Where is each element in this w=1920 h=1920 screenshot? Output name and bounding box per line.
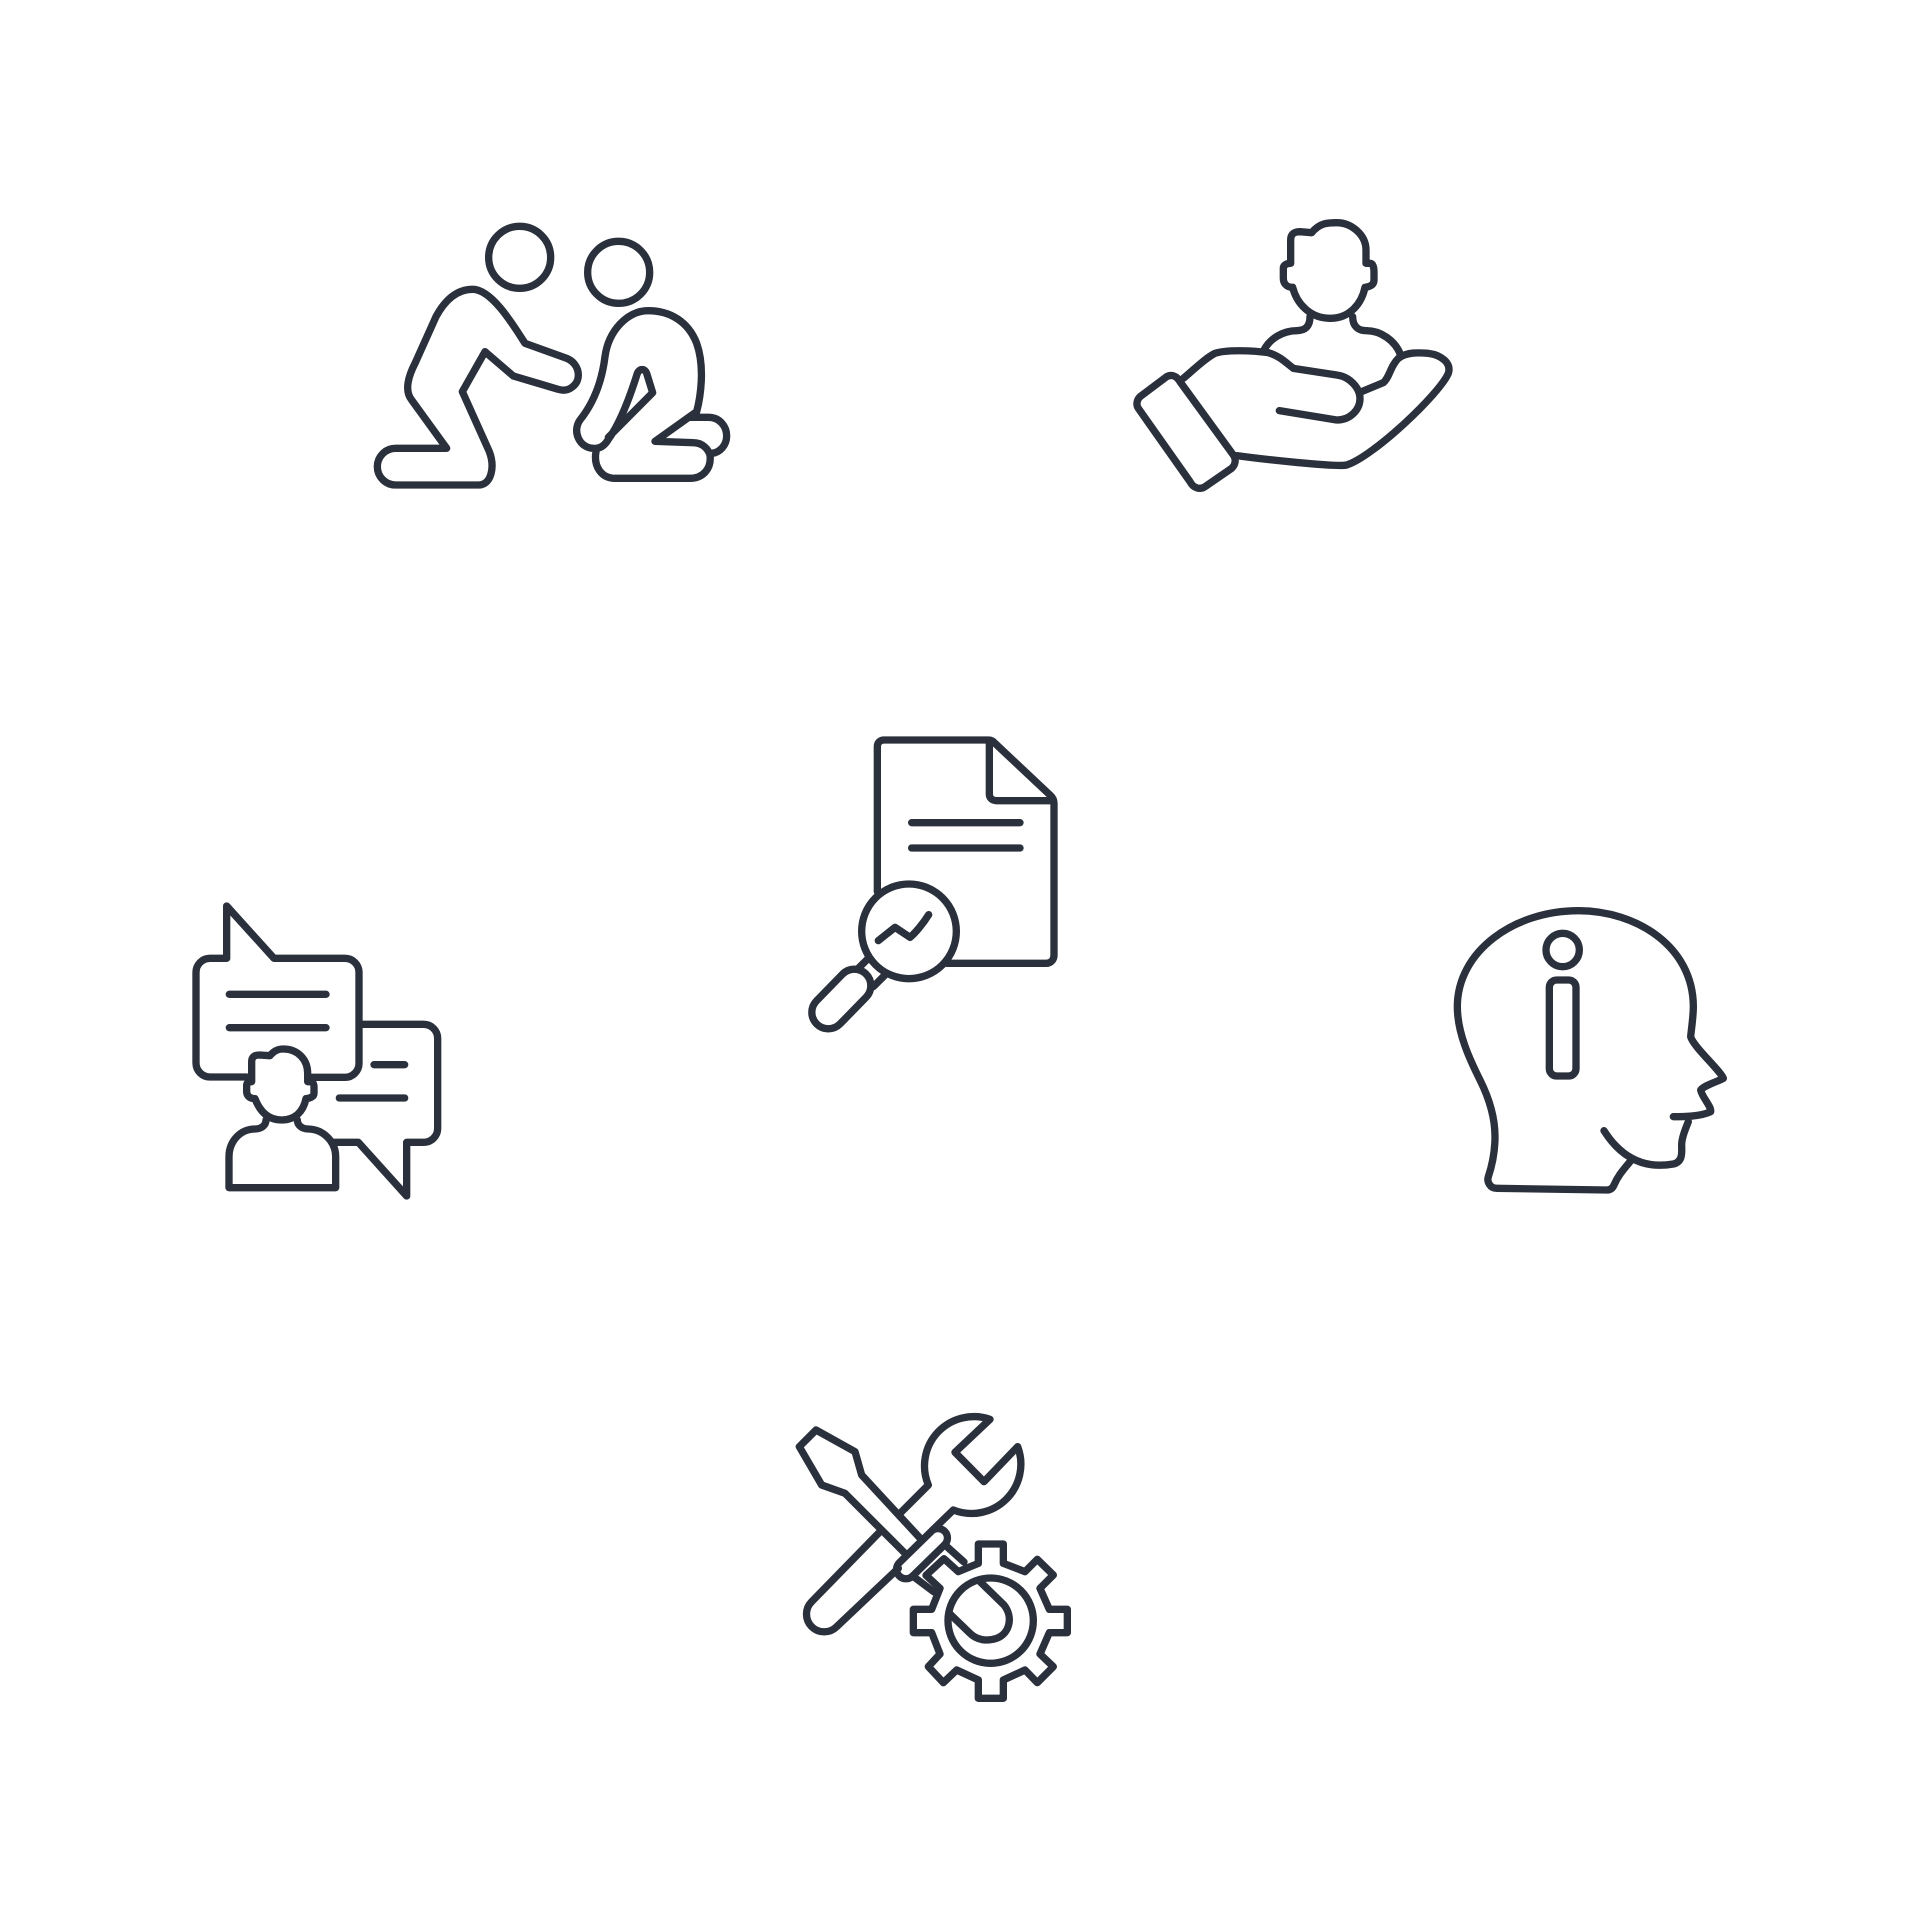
icon: head profile with information mark [1457,911,1723,1190]
person shoulders [1264,317,1401,355]
icon: document with magnifier [812,740,1054,1029]
folded corner [989,741,1053,801]
document sheet [877,740,1054,963]
lower speech bubble [333,1024,438,1196]
icon: person with speech bubbles [196,906,438,1196]
icon: two kneeling people [377,226,727,485]
screwdriver handle [806,1532,898,1632]
person head [247,1049,314,1120]
cuff [1137,375,1235,488]
screwdriver blade [799,1430,919,1553]
hand [1183,351,1449,465]
wrench head [901,1417,1021,1530]
upper speech bubble [196,906,359,1077]
person head [1283,223,1374,318]
head outline [1457,911,1723,1190]
lower bubble text lines [339,1065,405,1098]
right person head [588,241,650,303]
trend line [878,915,929,941]
gear inner circle [948,1578,1033,1663]
text lines [912,823,1020,848]
information dot [1546,933,1579,967]
magnifier handle [812,969,871,1029]
magnifier neck [858,958,885,987]
screwdriver collar [897,1529,947,1579]
gear outline [913,1544,1067,1698]
wrench tail [913,1545,964,1592]
jaw line [1604,1122,1688,1165]
icon: person on open hand [1137,223,1449,488]
magnifier lens [862,884,956,979]
information bar [1549,980,1576,1076]
upper bubble text lines [229,994,326,1028]
left person head [489,226,551,288]
wrench ring inside gear [949,1582,1009,1640]
person torso [229,1120,336,1188]
right person body [577,311,727,478]
left person body [377,289,578,485]
icon: screwdriver, wrench and gear [799,1417,1067,1698]
